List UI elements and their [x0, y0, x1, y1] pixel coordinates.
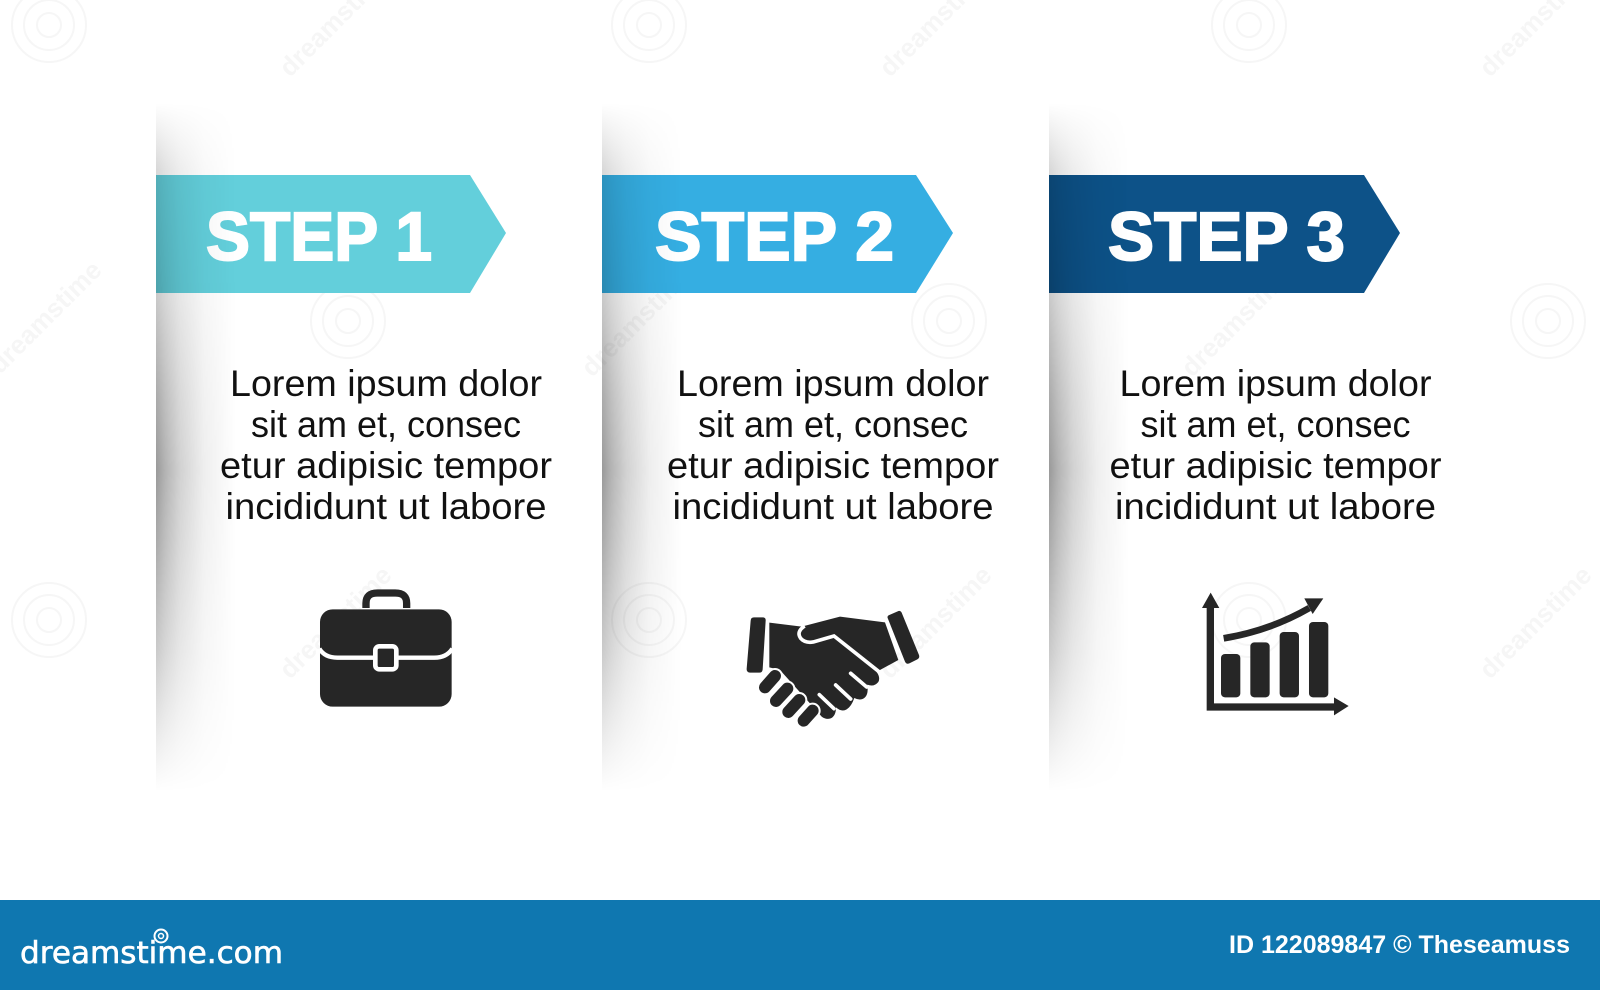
step 3 description: incididunt ut labore [1115, 486, 1436, 527]
footer credit: ID 122089847 © Theseamuss [1229, 931, 1570, 959]
step 1 description: incididunt ut labore [226, 486, 546, 527]
step 1 description [220, 363, 552, 527]
panel: step 3 [1049, 175, 1442, 715]
icon: handshake [747, 611, 919, 721]
step 2 description: incididunt ut labore [672, 486, 994, 527]
step 2 description: sit am et, consec [698, 404, 968, 445]
panel: step 2 [602, 175, 999, 721]
step 2 arrow banner [602, 175, 953, 293]
icon: growth chart [1202, 593, 1349, 715]
step 2 description: Lorem ipsum dolor [677, 363, 989, 404]
step 1 description: etur adipisic tempor [220, 445, 552, 486]
watermark pattern: dreamstime [1473, 560, 1597, 684]
step 1 description: Lorem ipsum dolor [230, 363, 542, 404]
step 3 arrow banner [1049, 175, 1400, 293]
watermark pattern [0, 0, 1597, 684]
step 3 description: Lorem ipsum dolor [1120, 363, 1432, 404]
icon: briefcase [319, 593, 452, 707]
step 3 description: etur adipisic tempor [1110, 445, 1442, 486]
step 2 description [667, 363, 999, 527]
step 1 description: sit am et, consec [251, 404, 521, 445]
footer logo: dreamstime.com [20, 936, 283, 971]
step 3 description [1110, 363, 1442, 527]
watermark pattern: dreamstime [1175, 258, 1299, 382]
footer bar [0, 900, 1600, 990]
panel: step 1 [156, 175, 552, 707]
step 1 arrow banner [156, 175, 506, 293]
watermark pattern: dreamstime [273, 560, 397, 684]
step 3 description: sit am et, consec [1140, 404, 1410, 445]
step 1 label: STEP 1 [206, 198, 432, 275]
step 2 label: STEP 2 [655, 198, 894, 275]
column shadows [156, 103, 1129, 792]
watermark pattern: dreamstime [873, 560, 997, 684]
watermark pattern: dreamstime [575, 258, 699, 382]
step 3 label: STEP 3 [1108, 198, 1345, 275]
step 2 description: etur adipisic tempor [667, 445, 999, 486]
